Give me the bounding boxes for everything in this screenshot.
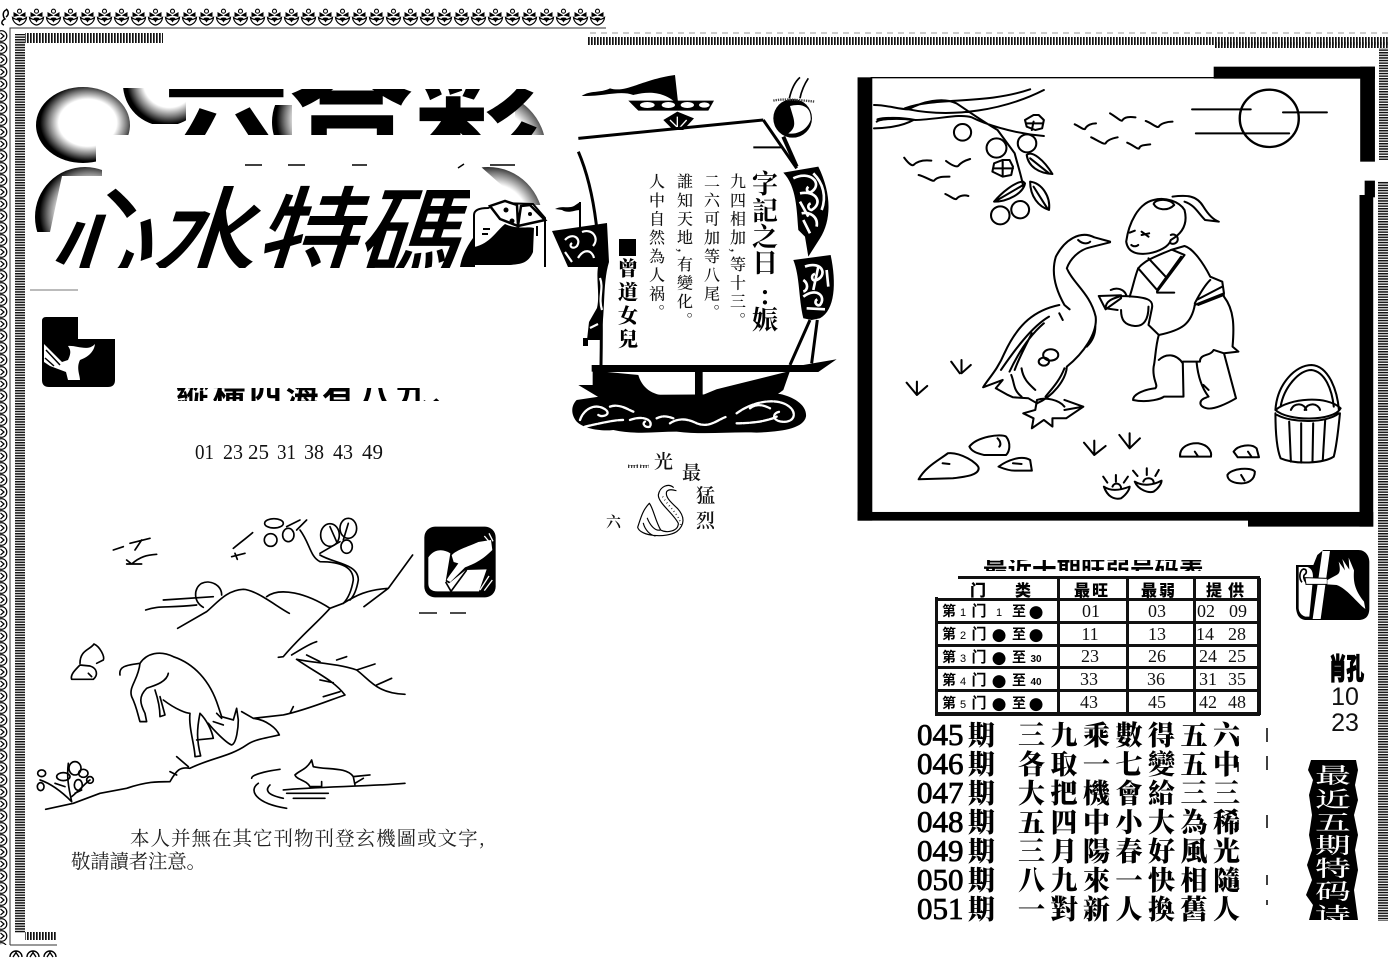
vertical heading: 最近五期特码诗: 近 <box>1315 783 1351 814</box>
illustration: ox on hillside <box>37 518 413 809</box>
ornate scroll base <box>572 394 806 433</box>
table grid <box>935 576 1261 716</box>
table values: 33 <box>1080 669 1098 689</box>
shrub <box>40 763 90 802</box>
table values: 36 <box>1147 669 1165 689</box>
sail poem columns <box>646 173 750 331</box>
snake with verse: 猛 <box>696 481 715 508</box>
table values: 42 <box>1199 692 1217 712</box>
row 046: 046 <box>917 746 964 781</box>
icon: hand on door handle <box>1296 550 1369 620</box>
birds <box>113 533 253 564</box>
sail heading: 日 <box>752 243 778 280</box>
sail outline <box>578 120 797 365</box>
row 051: 期 <box>968 888 995 927</box>
table values: 26 <box>1148 646 1166 666</box>
row 046: 各取一七變五中 <box>1018 743 1246 782</box>
row 048 <box>917 801 1246 840</box>
sail poem columns: 人中自然為人祸。 <box>646 173 668 323</box>
snake with verse: 六 <box>606 511 622 532</box>
table row labels: 5 <box>960 699 966 711</box>
side numbers: 23 <box>1331 709 1359 737</box>
table row labels: 门 <box>971 646 987 667</box>
side numbers <box>1329 646 1364 737</box>
row 047: 大把機會給三三 <box>1018 772 1246 811</box>
table row labels: 门 <box>971 669 987 690</box>
branch <box>874 89 1044 187</box>
heading: 心水特碼: 心水特碼 <box>38 155 494 302</box>
row 049: 期 <box>968 830 995 869</box>
table row labels: 至 <box>1012 693 1026 713</box>
table row labels: ● <box>1029 625 1043 645</box>
vertical heading: 最近五期特码诗: 特 <box>1315 852 1351 883</box>
table header <box>970 577 1250 601</box>
table row labels: 第 <box>942 624 956 644</box>
row 051: 051 <box>917 891 964 926</box>
row 048: 048 <box>917 804 964 839</box>
goose <box>1037 235 1110 403</box>
picture frame <box>858 67 1375 527</box>
notice text: 本人并無在其它刊物刊登玄機圖或文字, <box>130 823 485 851</box>
table values: 11 <box>1081 624 1099 644</box>
icon: snake <box>638 485 683 536</box>
table row labels <box>942 600 1043 714</box>
illustration: boy feeding goose <box>858 67 1375 527</box>
hull <box>592 359 837 372</box>
sail heading <box>752 164 778 337</box>
basket <box>1275 365 1339 410</box>
row 045: 三九乘數得五六 <box>1018 714 1246 753</box>
dashes under icon <box>419 612 466 614</box>
number list <box>195 440 383 464</box>
table values: 03 <box>1148 601 1166 621</box>
row 050 <box>917 859 1246 898</box>
sail heading: 娠 <box>752 300 778 337</box>
birds <box>904 113 1173 199</box>
row 047: 047 <box>917 775 964 810</box>
row 049: 049 <box>917 833 964 868</box>
row 051 <box>917 888 1246 927</box>
table row labels: 至 <box>1012 601 1026 621</box>
table row labels: 3 <box>960 653 966 665</box>
table row labels: 至 <box>1012 670 1026 690</box>
sail heading: 記 <box>752 191 778 228</box>
table header: 提供 <box>1206 577 1250 601</box>
flag and railing <box>582 75 678 105</box>
table row labels: 至 <box>1012 624 1026 644</box>
table row labels: ● <box>992 625 1006 645</box>
table row labels: ● <box>1029 602 1043 622</box>
table header: 类 <box>1015 577 1031 601</box>
table values: 13 <box>1148 624 1166 644</box>
notice text: 敬請讀者注意。 <box>71 846 206 874</box>
snake with verse <box>606 447 716 536</box>
row 046 <box>917 743 1246 782</box>
heading: 六合彩: 六合彩 <box>163 12 538 194</box>
table values: 14 <box>1196 624 1214 644</box>
table row labels: 1 <box>960 607 966 619</box>
table row labels: 门 <box>971 692 987 713</box>
sail heading: : <box>761 275 769 312</box>
tree <box>300 530 358 603</box>
vertical heading: 最近五期特码诗 <box>1306 759 1358 930</box>
number list: 25 <box>248 440 269 464</box>
table values: 23 <box>1081 646 1099 666</box>
side numbers: 肖孔 <box>1329 646 1364 688</box>
table values: 25 <box>1228 646 1246 666</box>
table values: 28 <box>1228 624 1246 644</box>
rocks <box>71 644 104 679</box>
icon: pointing hand <box>424 527 496 597</box>
row 046: 期 <box>968 743 995 782</box>
lantern <box>773 99 812 138</box>
sail poem columns: 誰知天地,有變化。 <box>674 173 696 331</box>
vertical heading: 最近五期特码诗: 五 <box>1315 806 1351 837</box>
table header: 门 <box>970 577 986 601</box>
snake with verse: 四四 <box>627 461 651 478</box>
grass tufts <box>907 360 1140 455</box>
table row labels: 1 <box>996 607 1002 619</box>
boy robe <box>1138 246 1224 305</box>
side numbers: 10 <box>1331 683 1359 711</box>
row 047: 期 <box>968 772 995 811</box>
vertical heading: 最近五期特码诗: 最 <box>1315 759 1351 790</box>
table row labels: ● <box>992 694 1006 714</box>
table row labels: 至 <box>1012 647 1026 667</box>
notice text <box>71 823 485 874</box>
icon: cards and purse <box>460 201 545 267</box>
table row labels: 30 <box>1030 654 1042 665</box>
table header: 最弱 <box>1141 577 1177 601</box>
snake with verse: 光 <box>654 447 673 474</box>
right banners <box>783 167 829 257</box>
moon <box>1240 90 1299 147</box>
sail signature: 曾道女兒 <box>614 257 642 352</box>
table row labels: ● <box>1029 694 1043 714</box>
vertical heading: 最近五期特码诗: 诗 <box>1315 899 1351 930</box>
table row labels: 第 <box>942 647 956 667</box>
table values: 48 <box>1228 692 1246 712</box>
row 045 <box>917 714 1246 753</box>
icon: rhino emblem <box>42 317 115 387</box>
row 049 <box>917 830 1246 869</box>
row 050: 期 <box>968 859 995 898</box>
table row labels: 门 <box>971 623 987 644</box>
left pennant <box>552 202 609 346</box>
table row labels: 第 <box>942 670 956 690</box>
row 051: 一對新人換舊人 <box>1018 888 1246 927</box>
shaded arcs behind the title <box>35 42 546 277</box>
row 050: 八九來一快相隨 <box>1018 859 1246 898</box>
vertical heading: 最近五期特码诗: 码 <box>1315 875 1351 906</box>
table values: 24 <box>1199 646 1217 666</box>
illustration: ship with sail <box>552 75 837 433</box>
table caption: 最近十期旺弱号码表 <box>983 551 1204 586</box>
table row labels: ● <box>992 671 1006 691</box>
number list: 23 <box>223 440 243 464</box>
table values: 09 <box>1229 601 1247 621</box>
sail poem columns: 九四相加,等十三。 <box>726 173 750 331</box>
row 048: 期 <box>968 801 995 840</box>
number list: 49 <box>362 440 383 464</box>
table values: 43 <box>1080 692 1098 712</box>
number list: 43 <box>333 440 353 464</box>
number list: 31 <box>277 440 296 464</box>
sail heading: 字 <box>752 164 778 201</box>
table values: 35 <box>1228 669 1246 689</box>
sail poem columns: 二六可加等八尾。 <box>700 173 724 323</box>
row 045: 045 <box>917 717 964 752</box>
rocks <box>919 453 979 479</box>
table header: 最旺 <box>1074 577 1110 601</box>
table values: 02 <box>1197 601 1215 621</box>
clipped verse line: 縱橫四海有八九、 <box>176 368 468 416</box>
sail heading: 之 <box>752 217 778 254</box>
row 048: 五四中小大為稀 <box>1018 801 1246 840</box>
table values: 31 <box>1199 669 1217 689</box>
ox <box>120 653 238 745</box>
snake with verse: 烈 <box>696 506 716 533</box>
table row labels: 2 <box>960 630 966 642</box>
row 050: 050 <box>917 862 964 897</box>
table section <box>935 551 1261 716</box>
table row labels: 门 <box>971 600 987 621</box>
table row labels: 第 <box>942 693 956 713</box>
vertical heading: 最近五期特码诗: 期 <box>1315 829 1351 860</box>
rabbit and water <box>295 760 370 787</box>
table values: 45 <box>1148 692 1166 712</box>
table row labels: 40 <box>1030 677 1042 688</box>
table row labels: ● <box>992 648 1006 668</box>
table values <box>1080 601 1247 712</box>
row 049: 三月陽春好風光 <box>1018 830 1246 869</box>
title banner: 六合彩 心水特碼 <box>35 87 548 268</box>
number list: 01 <box>195 440 214 464</box>
issue rows <box>917 714 1267 927</box>
row 045: 期 <box>968 714 995 753</box>
number list: 38 <box>304 440 324 464</box>
row 047 <box>917 772 1246 811</box>
snake with verse: 最 <box>682 458 701 485</box>
table values: 01 <box>1082 601 1100 621</box>
boy head <box>1126 199 1186 254</box>
table row labels: 第 <box>942 601 956 621</box>
table row labels: 4 <box>960 676 966 688</box>
